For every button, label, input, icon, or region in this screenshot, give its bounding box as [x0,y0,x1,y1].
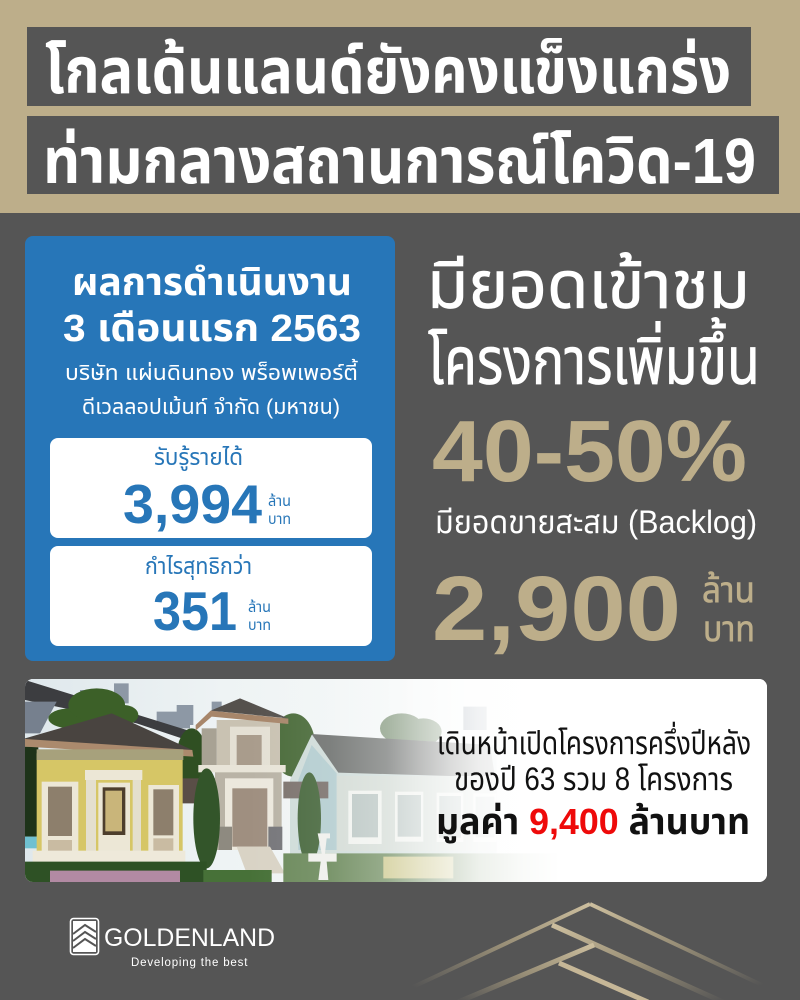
logo: Goldenland [70,918,275,969]
card: net profit: กำไรสุทธิกว่า [145,553,252,580]
panel: first 3 months results [25,236,395,661]
heading: visitors up: มียอดเข้าชม [427,248,750,322]
logo: Goldenland: Developing the best [131,957,248,969]
company name: ดีเวลลอปเม้นท์ จำกัด (มหาชน) [82,395,340,419]
company name [65,358,358,419]
garden [25,862,207,882]
top tan band [0,0,800,213]
panel: project photo banner [25,678,767,883]
card: revenue: รับรู้รายได้ [154,444,243,472]
stat: 2,900 million baht: 2,900 [432,558,681,660]
company name: บริษัท แผ่นดินทอง พร็อพเพอร์ตี้ [65,358,358,385]
card: revenue: 3,994 [123,473,262,535]
panel heading [63,262,361,350]
heading: visitors up [427,248,760,398]
card: revenue: ล้าน [268,493,291,510]
panel heading: ผลการดำเนินงาน [72,262,352,304]
white fade [284,706,584,882]
logo: Goldenland: GOLDENLAND [104,924,275,952]
card: net profit [50,546,372,646]
card: net profit: ล้าน [248,599,271,616]
card: net profit: 351 [153,580,237,642]
stat: 2,900 million baht: ล้าน [702,569,755,610]
cypress trees [193,768,220,868]
stat: 2,900 million baht: บาท [703,608,755,649]
logo icon [70,918,98,954]
fountain [308,833,337,880]
illustration: houses [25,679,514,882]
right house [290,735,460,854]
yellow house [37,753,183,855]
backlog label: มียอดขายสะสม (Backlog) [435,504,757,540]
panel heading: 3 เดือนแรก 2563 [63,308,361,350]
card: revenue: บาท [268,511,291,528]
centre tower [217,720,280,770]
card: revenue [50,438,372,538]
stat: 40-50%: 40-50% [432,403,747,500]
decorative chevrons [413,904,762,1000]
project announcement text [436,721,751,843]
project announcement text: ของปี 63 รวม 8 โครงการ [454,761,733,797]
project announcement text: มูลค่า 9,400 ล้านบาท [436,801,750,843]
card: net profit: บาท [248,617,271,634]
